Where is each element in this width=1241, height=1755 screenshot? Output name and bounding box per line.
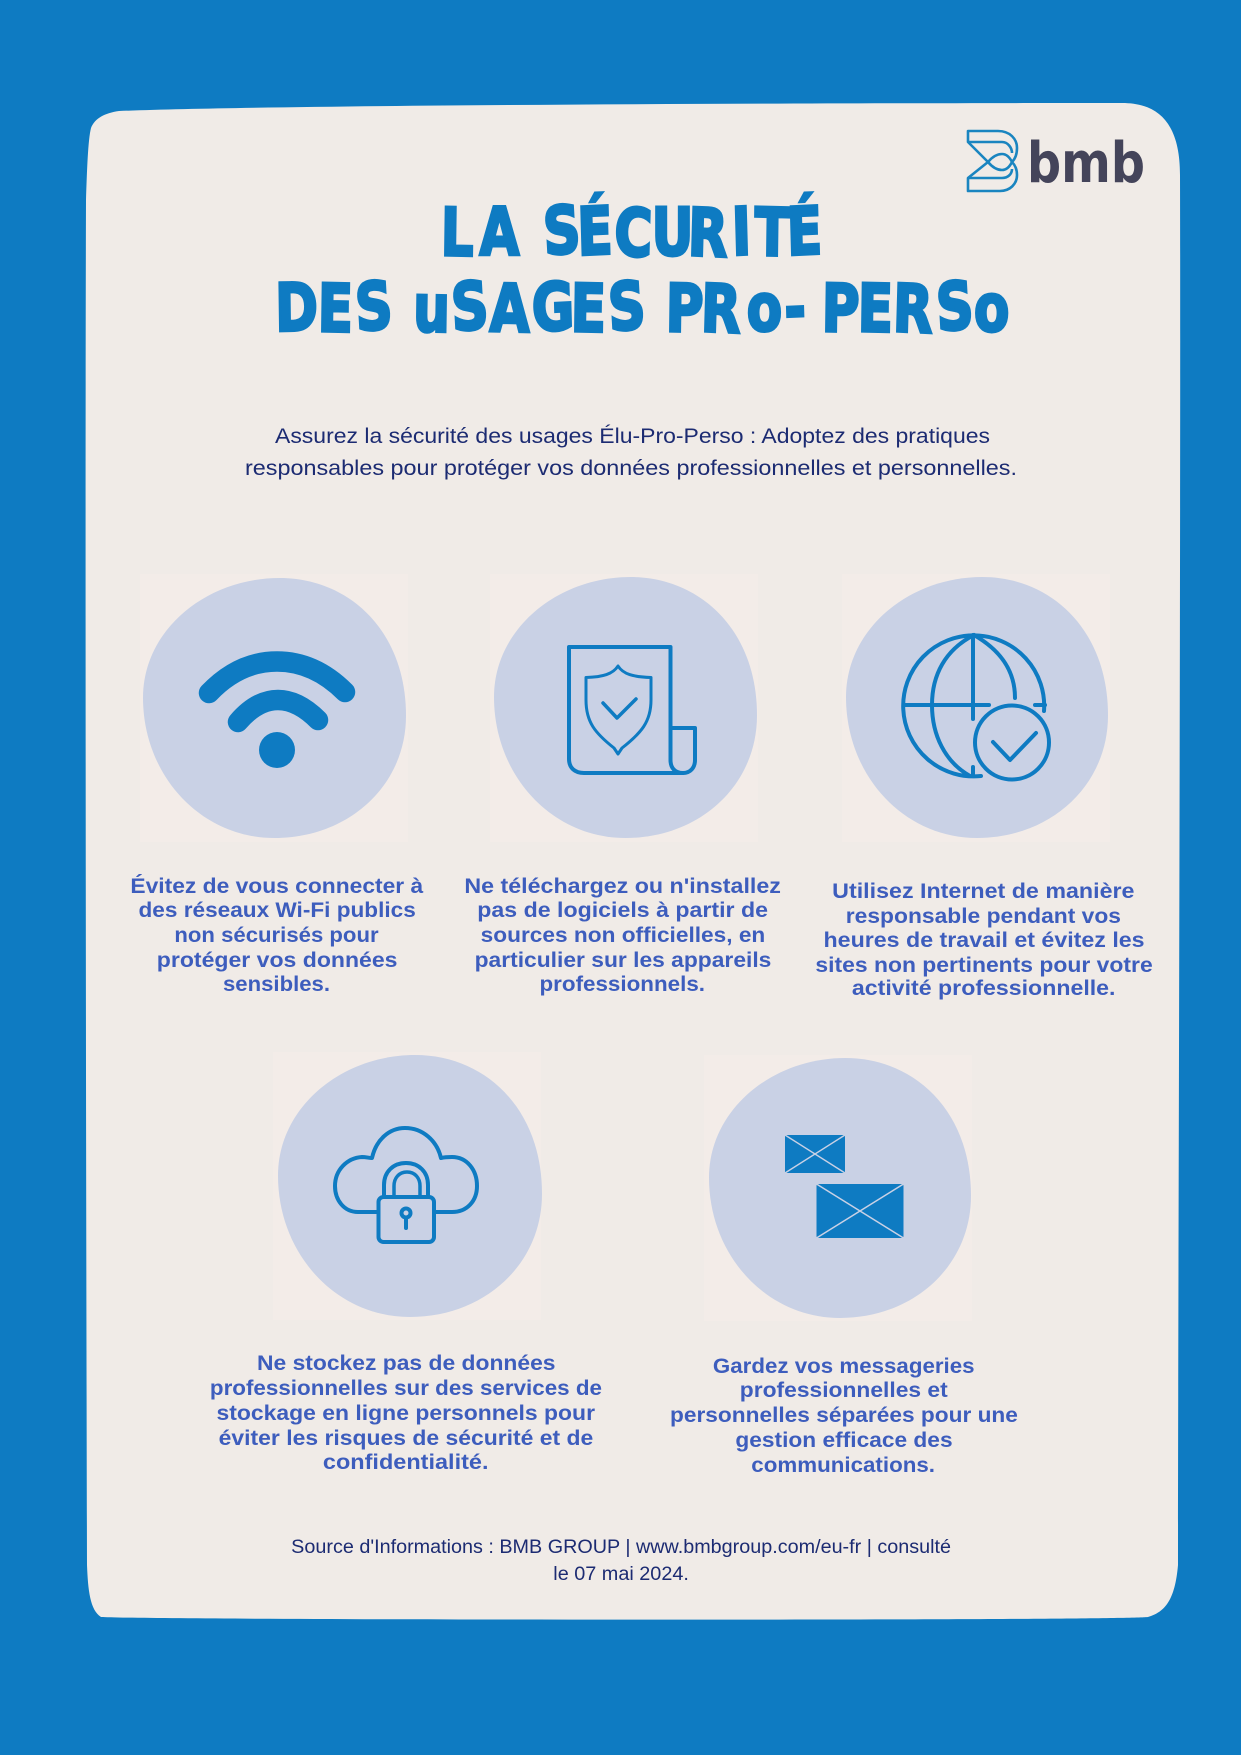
blob: cloud background xyxy=(278,1055,542,1317)
title xyxy=(275,191,1009,348)
source footer: le 07 mai 2024. xyxy=(553,1564,689,1585)
text: internet advice: heures de travail et évitez les xyxy=(824,928,1145,952)
panel: software advice xyxy=(464,574,781,996)
text: wifi advice: Évitez de vous connecter à xyxy=(130,873,424,898)
text: software advice: particulier sur les appareils xyxy=(475,948,771,972)
text: messaging advice: Gardez vos messageries xyxy=(713,1354,975,1378)
blob: envelopes background xyxy=(709,1058,971,1318)
text: software advice: sources non officielles, en xyxy=(481,923,765,947)
text: messaging advice xyxy=(670,1354,1018,1477)
text: wifi advice xyxy=(130,873,424,996)
text: cloud storage advice xyxy=(210,1351,602,1474)
text: cloud storage advice: stockage en ligne personnels pour xyxy=(216,1401,596,1425)
panel: cloud storage advice xyxy=(210,1052,602,1474)
text: software advice: Ne téléchargez ou n'installez xyxy=(464,874,781,898)
text: wifi advice: protéger vos données xyxy=(157,948,398,972)
icon: two envelopes xyxy=(785,1135,904,1238)
text: internet advice: sites non pertinents pour votre xyxy=(815,953,1153,977)
panel: messaging advice xyxy=(670,1055,1018,1477)
logo wordmark: bmb xyxy=(1027,131,1145,196)
text: internet advice: activité professionnelle. xyxy=(852,976,1116,1000)
text: wifi advice: non sécurisés pour xyxy=(174,923,379,947)
icon: bmb logo mark xyxy=(968,131,1017,191)
blob: wifi background xyxy=(143,578,406,838)
blob: globe background xyxy=(846,577,1108,838)
text: messaging advice: professionnelles et xyxy=(740,1378,948,1402)
text: software advice: professionnels. xyxy=(540,972,705,996)
icon: wifi xyxy=(209,662,345,768)
icon: document with shield xyxy=(569,647,695,773)
title line 1: LA SÉCURITÉ xyxy=(440,191,823,272)
source footer: Source d'Informations : BMB GROUP | www.bmbgroup.com/eu-fr | consulté xyxy=(291,1537,951,1558)
intro text xyxy=(245,425,1017,480)
text: cloud storage advice: confidentialité. xyxy=(323,1450,488,1474)
text: cloud storage advice: éviter les risques de sécurité et de xyxy=(219,1426,593,1450)
text: software advice: pas de logiciels à partir de xyxy=(477,898,768,922)
icon: globe with check xyxy=(903,635,1049,780)
text: wifi advice: des réseaux Wi-Fi publics xyxy=(138,898,416,922)
text: messaging advice: communications. xyxy=(751,1453,935,1477)
panel: internet advice xyxy=(815,574,1153,1000)
source footer xyxy=(291,1537,951,1585)
intro text: responsables pour protéger vos données professionnelles et personnelles. xyxy=(245,457,1017,480)
text: cloud storage advice: professionnelles sur des services de xyxy=(210,1376,602,1400)
text: internet advice: Utilisez Internet de manière xyxy=(832,879,1135,903)
text: wifi advice: sensibles. xyxy=(223,972,330,996)
text: messaging advice: gestion efficace des xyxy=(735,1428,953,1452)
title line 2: DES uSAGES PRo-PERSo xyxy=(275,267,1009,348)
text: messaging advice: personnelles séparées pour une xyxy=(670,1403,1018,1427)
panel: cream background card xyxy=(86,103,1180,1620)
logo: bmb xyxy=(968,131,1145,196)
text: internet advice: responsable pendant vos xyxy=(846,904,1121,928)
intro text: Assurez la sécurité des usages Élu-Pro-Perso : Adoptez des pratiques xyxy=(275,425,990,448)
text: cloud storage advice: Ne stockez pas de données xyxy=(257,1351,556,1375)
text: software advice xyxy=(464,874,781,996)
blob: document background xyxy=(494,577,757,838)
icon: cloud with padlock xyxy=(335,1128,477,1242)
panel: wifi advice xyxy=(130,574,424,996)
text: internet advice xyxy=(815,879,1153,1000)
